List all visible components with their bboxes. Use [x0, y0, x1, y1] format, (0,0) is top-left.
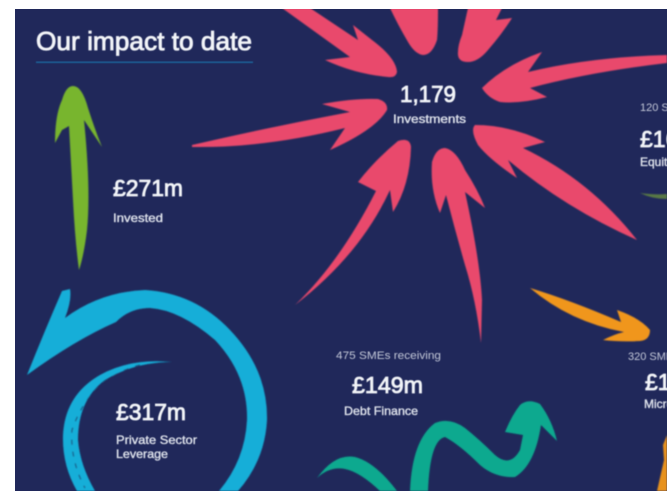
stat: debt finance [336, 350, 441, 418]
stat: equity finance [640, 102, 667, 169]
stat: debt finance: 475 SMEs receiving [336, 350, 441, 362]
icon: orange arrow at right edge [657, 435, 667, 491]
stat: investments: Investments [393, 112, 466, 126]
stat: invested: £271m [113, 175, 183, 201]
icon: green streak at right edge [640, 193, 667, 199]
stat: debt finance: Debt Finance [344, 404, 418, 418]
stat: invested: Invested [113, 211, 163, 225]
icon: teal wavy arrow [317, 401, 557, 491]
icon: brush texture on cyan inner spiral [72, 365, 140, 488]
stat: investments [393, 81, 466, 126]
icon: cyan circular arrow [27, 289, 267, 491]
icon: green arrow up [55, 86, 102, 270]
stat: debt finance: £149m [352, 372, 423, 398]
stat: private sector leverage: Leverage [116, 447, 168, 461]
stat: investments: 1,179 [400, 81, 456, 107]
stat: invested [113, 175, 183, 225]
icon: red arrows converging on investments [192, 8, 667, 343]
icon: orange arrow [530, 288, 650, 341]
stat: private sector leverage: £317m [116, 399, 186, 425]
title underline [36, 62, 253, 63]
stat: private sector leverage [116, 399, 197, 461]
stat: private sector leverage: Private Sector [116, 433, 197, 447]
stat: micro finance [628, 351, 667, 411]
title: Our impact to date [36, 26, 252, 56]
